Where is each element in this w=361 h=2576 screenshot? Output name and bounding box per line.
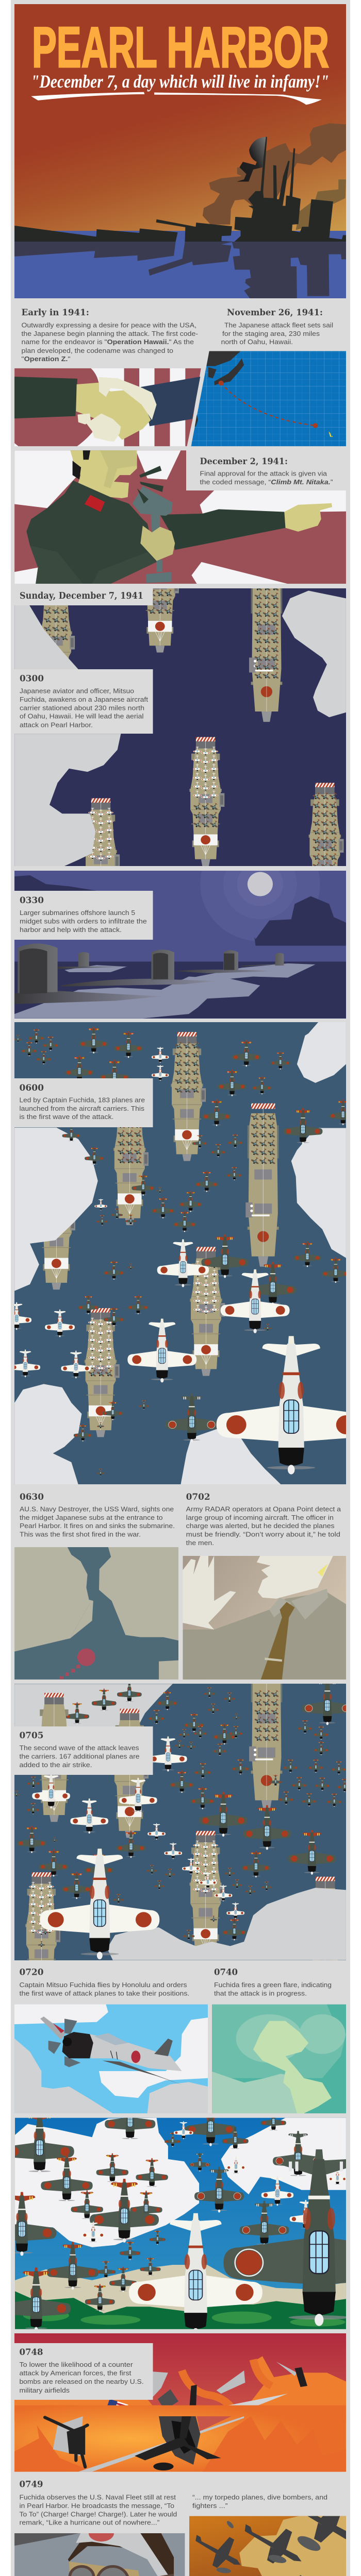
- text box: 0705: The second wave of the attack leaves: [20, 1744, 139, 1752]
- text: early in 1941: plan developed, the codename was changed to: [22, 347, 173, 354]
- wing strut: [78, 2416, 244, 2472]
- goggles: [70, 2566, 174, 2576]
- text: 0702: large group of incoming aircraft. The officer in: [186, 1514, 334, 1521]
- text box: 0330: [14, 891, 153, 940]
- cloud lower left: [14, 734, 121, 866]
- carrier under cloud: [40, 580, 75, 708]
- panel: zero fighter in sky: [14, 2004, 208, 2113]
- carriers: [25, 1693, 344, 2006]
- text box: december 2 1941: December 2, 1941:: [200, 456, 288, 466]
- carriers: [40, 1032, 279, 1437]
- text: 0740: 0740: [214, 1968, 238, 1977]
- underline swash: [31, 92, 322, 105]
- officer shirt: [183, 1592, 346, 1680]
- long carrier: [249, 1647, 282, 1811]
- battleship silhouette: [14, 137, 346, 242]
- text box: 0600: [14, 1078, 153, 1127]
- green planes: [13, 1720, 352, 1947]
- panel: planes over the island beach: [15, 2117, 346, 2329]
- flare burst: [253, 2021, 332, 2113]
- text: early in 1941: Outwardly expressing a desire for peace with the USA,: [22, 321, 196, 329]
- text box: 0705: added to the air strike.: [20, 1761, 92, 1769]
- large green plane: [223, 2149, 361, 2326]
- heading box: sunday december 7 1941: Sunday, December 7, 1941: [20, 591, 143, 601]
- panel: first wave launch: [14, 1022, 346, 1484]
- text: 0630: Pearl Harbor. It fires on and sinks the submarine.: [20, 1522, 175, 1530]
- text box: 0300: attack on Pearl Harbor.: [20, 721, 93, 728]
- green sleeve: [14, 377, 77, 418]
- text box: 0600: 0600: [20, 1083, 44, 1093]
- moon: [200, 827, 320, 941]
- leather helmet: [68, 2533, 174, 2576]
- raised hand: [183, 1556, 236, 1630]
- text: 0630: 0630: [20, 1492, 44, 1502]
- falling debris: [153, 2362, 307, 2416]
- text: 0720: [20, 1968, 189, 1997]
- text box: 0330: harbor and help with the attack.: [20, 926, 122, 934]
- long carrier: [249, 558, 282, 722]
- clasped hands: [76, 377, 157, 442]
- text: 0630: This was the first shot fired in the war.: [20, 1530, 141, 1538]
- japan and korea land: [195, 351, 244, 427]
- text box: december 2 1941: the coded message, “ Climb Mt. Nitaka. ”: [200, 478, 333, 486]
- beach: [15, 2265, 346, 2329]
- wreck left plane: [45, 2416, 88, 2467]
- panel: midget submarines under the moon: [14, 871, 346, 1019]
- dark sea: [14, 961, 346, 1019]
- white planes: [81, 2121, 347, 2336]
- submarines: [14, 943, 294, 1004]
- text: november 26 1941: The Japanese attack fleet sets sail: [224, 321, 333, 329]
- lower planes: [74, 1336, 361, 1476]
- bomber formation: [186, 2480, 361, 2576]
- panel: carrier fleet at night: [14, 588, 346, 866]
- text: november 26 1941: [221, 308, 333, 346]
- text box: december 2 1941: [186, 450, 346, 490]
- text: torpedo planes quote: fighters ...”: [192, 2502, 228, 2510]
- panel: airfield bombing: [14, 2333, 346, 2472]
- text: 0702: 0702: [186, 1492, 210, 1502]
- text box: 0600: Led by Captain Fuchida, 183 planes are: [20, 1096, 145, 1104]
- falling bombs: [207, 2520, 334, 2576]
- text: 0720: 0720: [20, 1968, 43, 1977]
- text box: 0705: the carriers. 167 additional planes are: [20, 1753, 139, 1760]
- text: torpedo planes quote: “... my torpedo planes, dive bombers, and: [192, 2494, 327, 2501]
- text box: 0300: Fuchida, awakens on a Japanese aircraft: [20, 696, 148, 703]
- text: early in 1941: "Operation Z. ": [22, 355, 71, 363]
- text: 0702: charge was alerted, but he decided the planes: [186, 1522, 335, 1530]
- bottom cloud: [107, 1888, 346, 1960]
- text: 0630: the midget Japanese subs at the entrance to: [20, 1514, 163, 1521]
- collar: [269, 1589, 328, 1620]
- american flag: [105, 2399, 128, 2417]
- night clouds: [14, 875, 346, 946]
- text: early in 1941: the Japanese begin planning the attack. The first code-: [22, 330, 198, 337]
- hand on microphone: [140, 526, 175, 561]
- text: early in 1941: Early in 1941:: [22, 308, 89, 317]
- text: 0749: Fuchida observes the U.S. Naval Fleet still at rest: [20, 2494, 176, 2501]
- zero plane: [40, 2016, 182, 2084]
- carrier lower right: [309, 783, 343, 912]
- tan cloud: [239, 2516, 346, 2576]
- text box: 0748: attack by American forces, the first: [20, 2369, 132, 2377]
- text box: december 2 1941: Final approval for the attack is given via: [200, 469, 327, 477]
- text box: 0748: bombs are released on the nearby U.S.: [20, 2378, 144, 2385]
- panel: bomber silhouettes: [189, 2516, 346, 2576]
- text box: 0330: Larger submarines offshore launch 5: [20, 909, 135, 917]
- carrier with green planes: [144, 523, 179, 653]
- panel: second wave launch: [14, 1684, 346, 1960]
- text: 0720: the first wave of attack planes to take their positions.: [20, 1989, 189, 1997]
- heading box: sunday december 7 1941: [14, 588, 153, 605]
- sunken sub marker: [60, 1649, 95, 1679]
- text: november 26 1941: north of Oahu, Hawaii.: [221, 338, 293, 346]
- text: 0720: Captain Mitsuo Fuchida flies by Honolulu and orders: [20, 1981, 187, 1989]
- clouds: [14, 1020, 346, 1291]
- ship reflection: [14, 242, 346, 298]
- text: november 26 1941: November 26, 1941:: [227, 308, 323, 317]
- panel: route map: [191, 351, 346, 446]
- shout marks: [137, 466, 163, 504]
- pointing hand: [284, 503, 332, 532]
- text box: 0300: carrier stationed about 230 miles north: [20, 704, 144, 712]
- microphone: [133, 486, 173, 583]
- fleet route: [219, 381, 318, 428]
- fire plumes: [14, 2356, 346, 2416]
- text: 0740: Fuchida fires a green flare, indicating: [214, 1981, 332, 1989]
- cumulus clouds: [15, 2118, 346, 2247]
- text box: 0300: Japanese aviator and officer, Mitsuo: [20, 687, 134, 694]
- text: torpedo planes quote: [192, 2494, 327, 2510]
- soldier uniform: [26, 481, 157, 584]
- carrier lower left: [85, 798, 120, 927]
- panel: radar officer: [183, 1556, 346, 1680]
- text box: 0330: midget subs with orders to infiltrate the: [20, 917, 147, 925]
- flag flying from mast: [237, 137, 266, 182]
- text box: 0748: 0748: [20, 2347, 43, 2357]
- officer face: [257, 1556, 333, 1599]
- panel: harbor entrance map: [14, 1547, 178, 1680]
- coastal clouds: [14, 590, 346, 717]
- text: 0740: that the attack is in progress.: [214, 1989, 307, 1997]
- blue sleeve: [141, 377, 200, 426]
- text: 0749: [20, 2480, 177, 2527]
- text box: 0705: [14, 1726, 153, 1775]
- text box: 0330: 0330: [20, 895, 44, 905]
- soldier head: [70, 450, 137, 498]
- panel: hero poster: [14, 4, 346, 298]
- text box: 0748: To lower the likelihood of a counter: [20, 2361, 133, 2368]
- text: 0702: must be friendly. “Don’t worry about it,” he told: [186, 1530, 340, 1538]
- wheel: [153, 2463, 174, 2470]
- text: 0740: [214, 1968, 332, 1997]
- text box: 0600: is the first wave of the attack.: [20, 1113, 113, 1121]
- text: 0749: remark, “Like a hurricane out of nowhere...”: [20, 2519, 159, 2527]
- text box: 0600: launched from the aircraft carriers. This: [20, 1105, 144, 1112]
- wreck right plane: [135, 2416, 221, 2465]
- explosion field: [14, 2405, 346, 2472]
- panel: fuchida portrait: [14, 2533, 185, 2576]
- collar badge: [85, 495, 105, 512]
- white clouds: [14, 2005, 208, 2098]
- hawaii: [329, 432, 333, 437]
- text: early in 1941: [22, 308, 198, 363]
- white planes: [2, 1047, 290, 1382]
- panel: handshake: [14, 368, 201, 446]
- text: 0702: the men.: [186, 1539, 214, 1547]
- outstretched arm: [160, 509, 286, 550]
- text box: 0300: of Oahu, Hawaii. He will lead the aerial: [20, 713, 144, 720]
- text box: 0748: military airfields: [20, 2386, 70, 2394]
- panel: green flare: [212, 2004, 346, 2113]
- carrier centre: [189, 737, 224, 866]
- coast cloud: [14, 1684, 173, 1737]
- text: early in 1941: name for the endeavor is " Operation Hawaii. " As the: [22, 338, 194, 346]
- squadron of green planes: [0, 2096, 323, 2331]
- grey clouds: [14, 2039, 208, 2113]
- text: 0749: in Pearl Harbor. He broadcasts the message, “To: [20, 2502, 174, 2510]
- lower clouds: [14, 1384, 281, 1484]
- panel: soldier with microphone: [14, 450, 346, 584]
- face: [69, 2562, 147, 2576]
- white planes: [32, 1736, 244, 1959]
- text: 0630: [20, 1492, 175, 1538]
- text: 0702: Army RADAR operators at Opana Point detect a: [186, 1505, 341, 1513]
- jungle: [15, 2291, 346, 2329]
- text box: 0300: 0300: [20, 674, 44, 683]
- text: november 26 1941: for the staging area, 230 miles: [222, 330, 320, 337]
- text box: 0748: [14, 2343, 153, 2400]
- harbor water: [14, 231, 346, 298]
- green planes: [14, 1027, 357, 1331]
- red sun and stripes: [14, 368, 201, 446]
- text box: 0705: 0705: [20, 1731, 43, 1740]
- upper planes: [65, 1679, 353, 1732]
- text: 0749: 0749: [20, 2480, 43, 2489]
- necktie: [261, 1602, 294, 1680]
- smoke plumes: [203, 123, 346, 230]
- text: 0749: To To” (Charge! Charge! Charge!). Later he would: [20, 2510, 177, 2518]
- text box: 0300: [14, 669, 153, 734]
- wake foam: [14, 963, 316, 1019]
- text: 0630: AU.S. Navy Destroyer, the USS Ward, sights one: [20, 1505, 174, 1513]
- text: 0702: [186, 1492, 341, 1547]
